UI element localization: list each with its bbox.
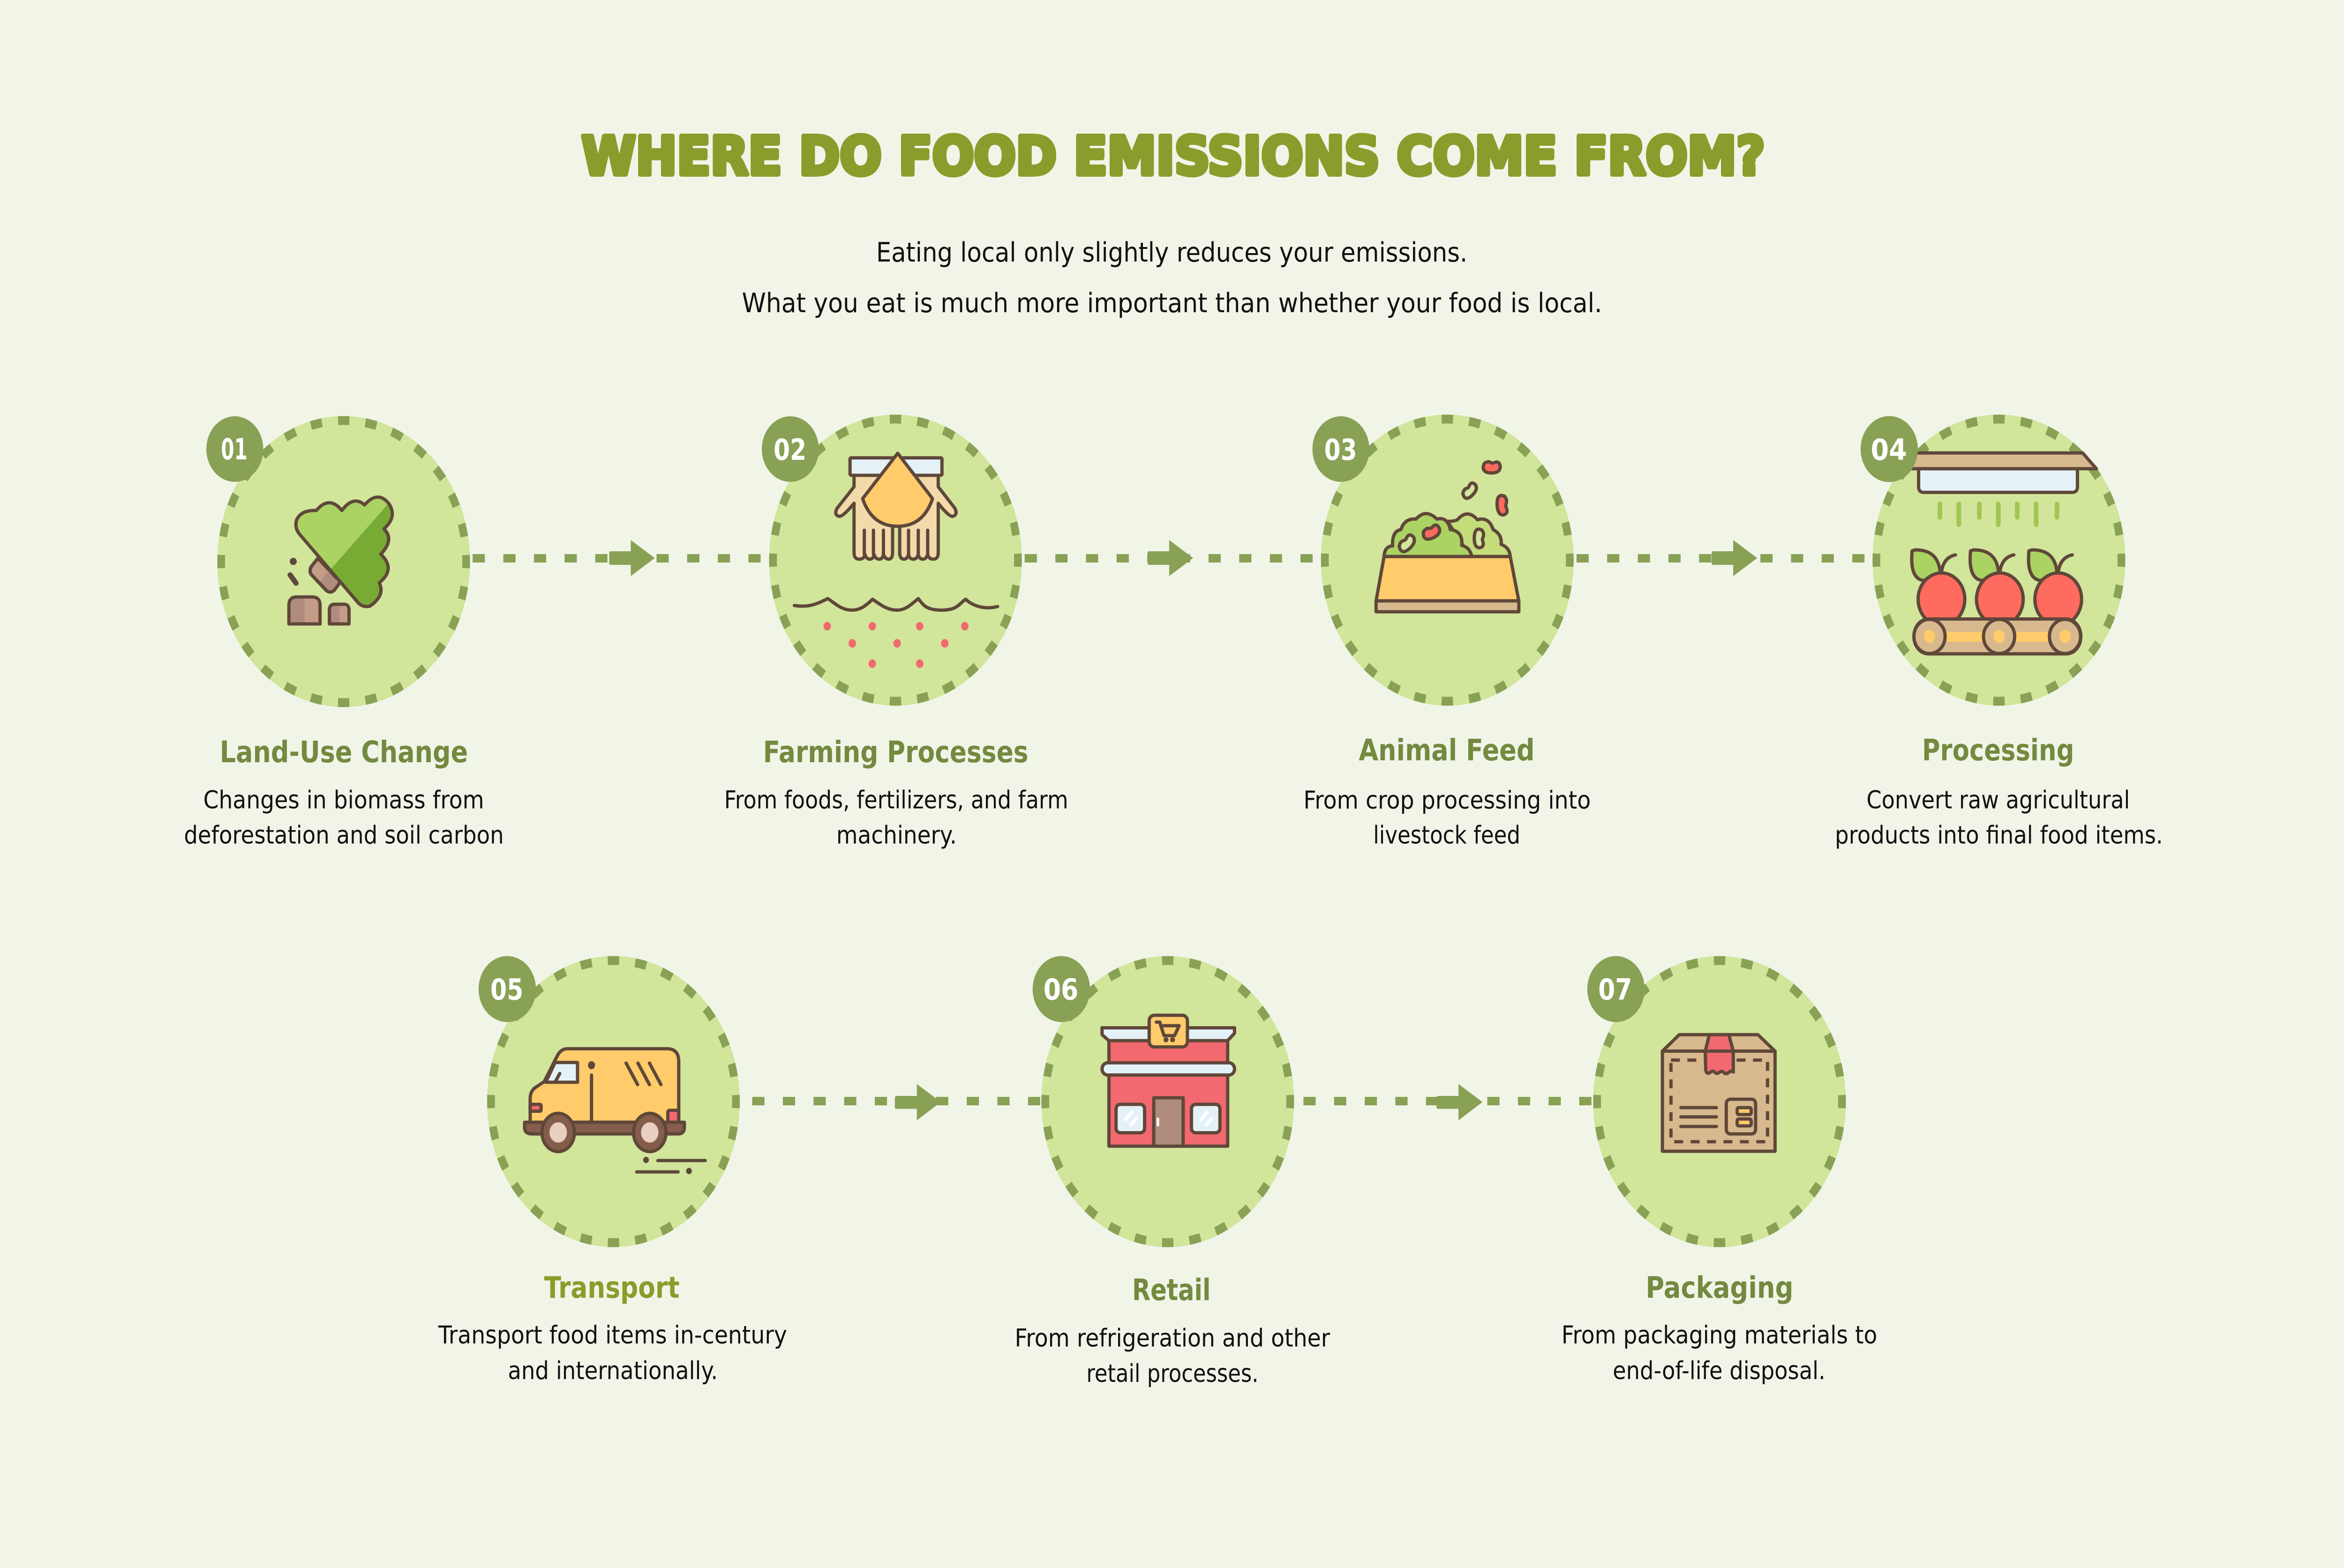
arrow connector: step 2 to 3	[1025, 540, 1314, 576]
description: transport: and internationally.	[508, 1356, 718, 1385]
icon: delivery van	[525, 1049, 705, 1172]
description: packaging	[1562, 1320, 1877, 1385]
number badge 07: 07	[1598, 973, 1632, 1007]
description: processing: Convert raw agricultural	[1866, 785, 2130, 814]
description: land-use change: Changes in biomass from	[203, 785, 484, 814]
heading: processing: Processing	[1922, 733, 2074, 767]
description: land-use change: deforestation and soil carbon	[184, 820, 504, 849]
description: animal feed: From crop processing into	[1303, 786, 1591, 815]
description: packaging: end-of-life disposal.	[1613, 1356, 1826, 1385]
arrow connector: step 5 to 6	[752, 1084, 1041, 1120]
heading: land-use change: Land-Use Change	[220, 735, 468, 769]
description: processing	[1835, 785, 2163, 849]
icon: cardboard box	[1662, 1035, 1775, 1151]
heading: retail: Retail	[1132, 1273, 1210, 1307]
number badge 01: 01	[221, 432, 248, 466]
description: retail: retail processes.	[1086, 1359, 1259, 1388]
arrow connector: step 1 to 2	[473, 540, 762, 576]
icon: falling tree	[289, 497, 392, 624]
heading: animal feed: Animal Feed	[1359, 733, 1534, 767]
subtitle: Eating local only slightly reduces your emissions.	[876, 237, 1467, 268]
subtitle: What you eat is much more important than whether your food is local.	[742, 287, 1602, 319]
description: transport	[438, 1320, 787, 1385]
number badge 01	[206, 416, 263, 482]
description: processing: products into final food items.	[1835, 820, 2163, 849]
title: WHERE DO FOOD EMISSIONS COME FROM?	[581, 126, 1765, 187]
step 04: processing	[1835, 414, 2163, 849]
step 05: transport	[438, 956, 787, 1385]
number badge 07	[1587, 956, 1645, 1022]
subtitle	[742, 237, 1602, 319]
number badge 04	[1861, 416, 1918, 482]
step 03: animal feed	[1303, 414, 1591, 849]
step 02: farming processes	[724, 414, 1068, 849]
description: land-use change	[184, 785, 504, 849]
description: animal feed: livestock feed	[1373, 820, 1520, 849]
icon: conveyor with apples	[1909, 453, 2096, 654]
number badge 02: 02	[774, 433, 806, 467]
number badge 05	[479, 956, 536, 1022]
description: farming processes	[724, 785, 1068, 849]
number badge 06: 06	[1044, 973, 1078, 1007]
number badge 03	[1312, 416, 1369, 482]
icon: hands and soil	[794, 453, 998, 668]
step 06: retail	[1014, 956, 1330, 1388]
description: retail	[1014, 1323, 1330, 1388]
heading: packaging: Packaging	[1645, 1270, 1794, 1305]
heading: farming processes: Farming Processes	[763, 735, 1029, 769]
number badge 05: 05	[490, 973, 523, 1007]
arrow connector: step 3 to 4	[1577, 540, 1865, 576]
description: farming processes: From foods, fertilizers, and farm	[724, 785, 1068, 814]
icon: grocery store	[1102, 1015, 1234, 1146]
number badge 04: 04	[1871, 433, 1907, 467]
description: transport: Transport food items in-century	[438, 1320, 787, 1350]
step 07: packaging	[1562, 956, 1877, 1385]
number badge 02	[762, 416, 819, 482]
icon: feed bowl	[1376, 462, 1519, 612]
description: farming processes: machinery.	[836, 820, 957, 849]
step 01: land-use change	[184, 416, 504, 849]
description: packaging: From packaging materials to	[1562, 1320, 1877, 1350]
heading: transport: Transport	[544, 1270, 680, 1305]
number badge 03: 03	[1324, 433, 1357, 467]
description: retail: From refrigeration and other	[1014, 1323, 1330, 1352]
number badge 06	[1033, 956, 1090, 1022]
description: animal feed	[1303, 786, 1591, 849]
arrow connector: step 6 to 7	[1303, 1084, 1593, 1120]
